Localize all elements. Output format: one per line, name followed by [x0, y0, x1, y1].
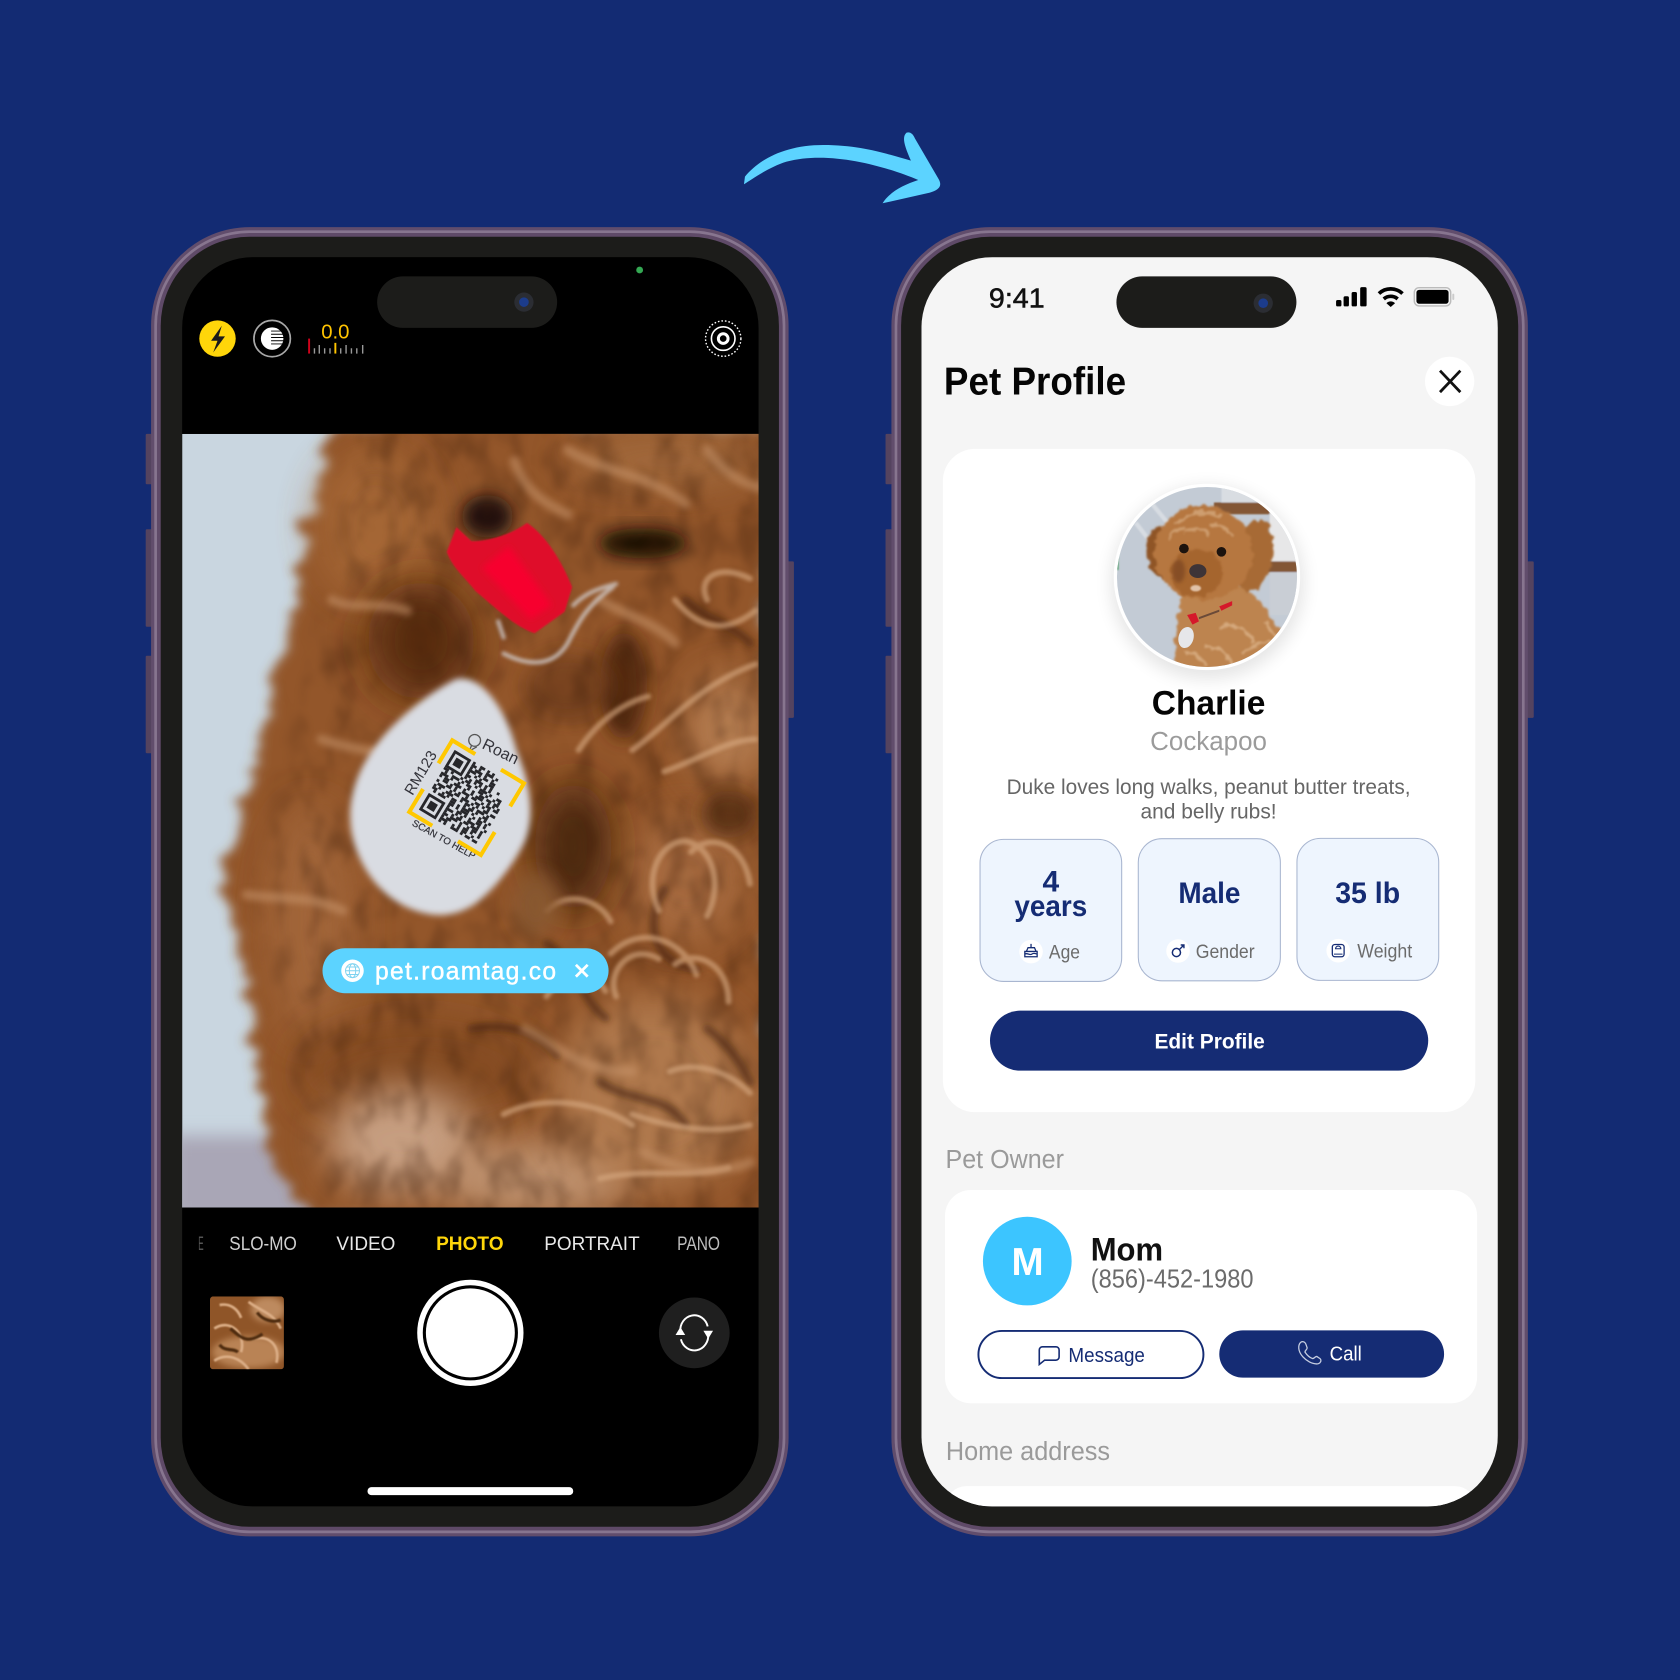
- owner avatar: M: [1011, 1241, 1044, 1284]
- status time: 9:41: [989, 282, 1045, 313]
- owner avatar: [983, 1217, 1072, 1305]
- dynamic island right: [1116, 276, 1296, 328]
- phone left: camera: [146, 227, 794, 1536]
- stat: gender: Male: [1178, 877, 1241, 910]
- dog body highlights: [1184, 621, 1286, 666]
- green camera indicator: [636, 267, 643, 273]
- wifi dot: [1386, 301, 1395, 307]
- phone right: pet profile: [886, 227, 1534, 1550]
- exposure readout: [309, 322, 363, 354]
- message button: Message: [1068, 1345, 1145, 1367]
- icon: night mode: [254, 320, 290, 357]
- dog head: [1154, 506, 1252, 600]
- collar highlight: [482, 546, 552, 619]
- QR code with scan brackets: [409, 740, 524, 855]
- pet description: Duke loves long walks, peanut butter treats,: [1007, 775, 1411, 799]
- stat: weight: [1297, 838, 1439, 980]
- avatar ring: [1114, 484, 1300, 670]
- camera mode labels: PANO: [677, 1234, 720, 1255]
- icon: chat bubble: [1039, 1347, 1059, 1364]
- tag printed text: SCAN TO HELP: [410, 818, 477, 862]
- shutter button: [420, 1282, 521, 1383]
- camera screen: [182, 257, 759, 1506]
- stat: age: years: [1014, 890, 1087, 923]
- call button: [1219, 1330, 1444, 1378]
- dog snout: [1171, 550, 1222, 597]
- hair strand texture: [262, 423, 771, 1221]
- light curls: [504, 572, 755, 1179]
- heading: home address: Home address: [946, 1438, 1110, 1466]
- home indicator: [368, 1487, 573, 1495]
- stat: gender: [1138, 839, 1280, 981]
- pet name: Charlie: [1152, 685, 1265, 723]
- stat: weight: 35 lb: [1335, 877, 1400, 910]
- screen title: Pet Profile: [944, 360, 1126, 403]
- dog eyes and nose: [1179, 544, 1226, 578]
- icon: globe: [341, 959, 364, 982]
- tag printed text: RM123: [401, 748, 441, 798]
- fur over tag edge: [512, 873, 559, 938]
- dog portrait: [1117, 487, 1297, 667]
- camera mode labels: E: [198, 1234, 204, 1255]
- camera mode labels: PORTRAIT: [544, 1234, 640, 1255]
- dog head top curls: [1168, 512, 1234, 539]
- fur shading: [268, 433, 771, 1216]
- light wall background: [171, 434, 759, 1221]
- dog muzzle shadow: [1172, 559, 1185, 583]
- gallery thumbnail: [210, 1296, 285, 1369]
- stat: age: [980, 839, 1122, 981]
- icon: close: [576, 965, 588, 977]
- white tag: [350, 679, 530, 915]
- dog collar: [1187, 601, 1232, 625]
- icon: battery: [1414, 288, 1454, 306]
- pet description: and belly rubs!: [1141, 800, 1277, 824]
- phone frame left: [146, 227, 794, 1536]
- pet description: [1007, 775, 1411, 824]
- arrow between phones: [744, 132, 940, 203]
- dog body: [1172, 586, 1282, 667]
- icon: phone: [1299, 1342, 1321, 1364]
- fur mass: [222, 423, 771, 1221]
- camera mode labels: VIDEO: [336, 1234, 395, 1255]
- tag printed text: [404, 738, 518, 858]
- camera mode labels: [198, 1234, 720, 1255]
- stat: gender: Gender: [1196, 942, 1255, 963]
- dog tag: [1178, 627, 1194, 648]
- scan brackets: [409, 740, 524, 855]
- status icons: [1336, 287, 1454, 307]
- dog ears: [1141, 516, 1279, 594]
- pale strands near collar: [498, 584, 616, 662]
- message button: [978, 1331, 1203, 1378]
- icon: signal: [1336, 287, 1367, 306]
- call button: Call: [1330, 1344, 1362, 1366]
- edit profile button: Edit Profile: [1154, 1029, 1265, 1053]
- owner name: Mom: [1091, 1232, 1163, 1268]
- red collar: [447, 523, 572, 633]
- icon: cake: [1019, 940, 1043, 963]
- phone frame right: [886, 227, 1534, 1536]
- panel: pet card: [943, 449, 1475, 1112]
- tag logo: [469, 734, 481, 751]
- pet breed: Cockapoo: [1150, 728, 1267, 756]
- stat: age: 4: [1043, 865, 1060, 898]
- soft tan strands: [246, 450, 759, 1170]
- icon: flash: [199, 320, 236, 357]
- dark curls: [471, 600, 750, 1125]
- camera mode labels: SLO-MO: [229, 1234, 297, 1255]
- dynamic island left: [377, 276, 557, 328]
- flip camera button: [659, 1298, 730, 1368]
- camera mode labels: PHOTO: [436, 1234, 504, 1255]
- icon: wifi: [1379, 289, 1402, 299]
- exposure readout: 0.0: [321, 322, 349, 344]
- icon: male symbol: [1166, 939, 1190, 963]
- edit profile button: [990, 1011, 1428, 1071]
- icon: scale: [1326, 939, 1350, 962]
- stat: age: Age: [1049, 942, 1080, 963]
- panel: owner card: [945, 1190, 1477, 1403]
- URL pill: pet.roamtag.co: [375, 958, 556, 985]
- avatar shadow: [1111, 486, 1304, 679]
- profile screen: [921, 257, 1498, 1550]
- tag printed text: Roan: [479, 735, 522, 768]
- owner phone: (856)-452-1980: [1091, 1265, 1254, 1293]
- close button: [1425, 357, 1474, 406]
- heading: pet owner: Pet Owner: [946, 1146, 1064, 1174]
- URL pill: [322, 948, 609, 993]
- stat: weight: Weight: [1357, 941, 1413, 962]
- dog mouth: [1190, 585, 1201, 591]
- bottom address card: [951, 1486, 1470, 1506]
- camera photo: dog fur with tag: [171, 423, 771, 1221]
- icon: live photo: [706, 321, 741, 356]
